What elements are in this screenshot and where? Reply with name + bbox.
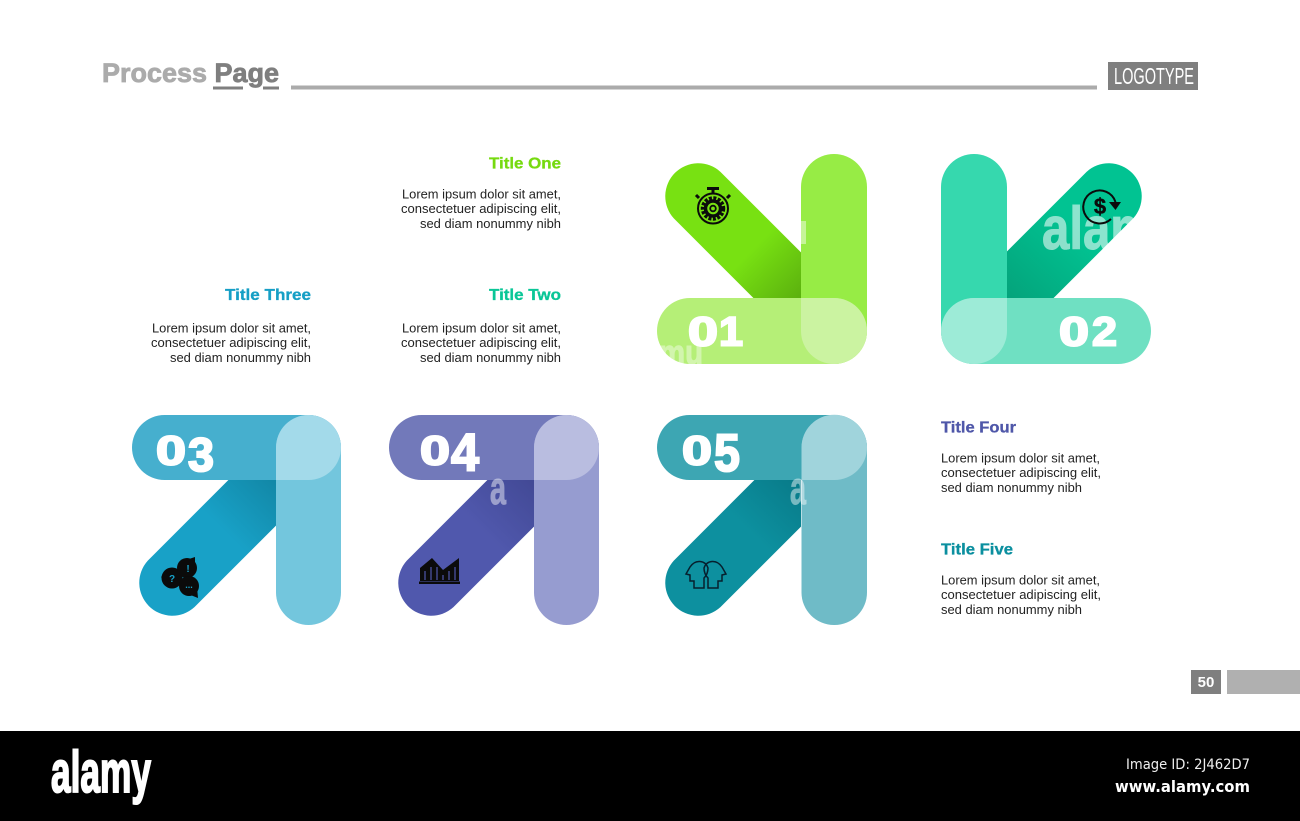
diagonal shaft xyxy=(665,480,801,616)
header rule xyxy=(291,86,1097,90)
text block: Title Five: consectetuer adipiscing elit, xyxy=(941,587,1101,602)
watermark fragment xyxy=(801,221,806,244)
text block: Title Five: Title Five xyxy=(941,542,1013,558)
icon: three speech bubbles: ! xyxy=(186,564,190,575)
number 03: 3 xyxy=(188,428,214,481)
text block: Title Two: sed diam nonummy nibh xyxy=(420,350,561,365)
icon: three speech bubbles: ? xyxy=(169,574,175,585)
watermark fragment: a xyxy=(790,462,806,514)
number 02: 0 xyxy=(1059,308,1089,354)
number 02: 2 xyxy=(1092,308,1117,354)
diagonal shaft xyxy=(665,163,801,298)
bar overlap xyxy=(941,298,1007,364)
watermark fragment: a xyxy=(490,462,506,514)
text block: Title Five xyxy=(941,542,1101,617)
icon: dollar cycle: $ xyxy=(1094,194,1106,219)
header xyxy=(102,58,1198,90)
horizontal bar xyxy=(389,415,599,480)
website: www.alamy.com xyxy=(1115,777,1250,796)
watermark fragment: mu xyxy=(659,334,703,372)
bar overlap xyxy=(801,298,867,364)
icon: three speech bubbles xyxy=(161,557,199,598)
bar overlap xyxy=(276,415,341,480)
arrow 02 xyxy=(941,154,1154,364)
number 05 xyxy=(682,424,740,483)
number 05: 5 xyxy=(714,424,740,483)
number 04: 0 xyxy=(420,428,450,474)
text block: Title One: sed diam nonummy nibh xyxy=(420,216,561,231)
icon: stopwatch with gear xyxy=(696,188,730,224)
text block: Title Three: consectetuer adipiscing elit, xyxy=(151,335,311,350)
arrow 01 xyxy=(657,154,867,364)
vertical bar xyxy=(941,154,1007,364)
text block: Title Three xyxy=(151,287,311,365)
text block: Title One: Lorem ipsum dolor sit amet, xyxy=(402,186,561,202)
vertical bar xyxy=(802,415,867,625)
text block: Title Two xyxy=(401,287,561,365)
logotype badge: LOGOTYPE xyxy=(1114,63,1194,89)
text block: Title Three: Title Three xyxy=(225,287,311,304)
text block: Title One xyxy=(401,156,561,231)
icon: three speech bubbles: ... xyxy=(185,580,193,590)
title underline xyxy=(213,86,279,90)
footer logo: alamy: alamy xyxy=(51,740,151,805)
text block: Title Three: sed diam nonummy nibh xyxy=(170,350,311,365)
number 02 xyxy=(1059,308,1117,354)
number 01 xyxy=(688,308,743,354)
number 04: 4 xyxy=(451,424,479,482)
icon: two heads xyxy=(686,561,726,588)
vertical bar xyxy=(276,415,341,625)
text block: Title One: consectetuer adipiscing elit, xyxy=(401,201,561,216)
icon: line and bar chart xyxy=(419,558,460,584)
number 01: 1 xyxy=(719,308,743,354)
horizontal bar xyxy=(657,415,867,480)
horizontal bar xyxy=(657,298,867,364)
number 01: 0 xyxy=(688,308,718,354)
image id: Image ID: 2J462D7 xyxy=(1126,757,1250,773)
arrow 03 xyxy=(132,415,341,625)
text block: Title Four: Lorem ipsum dolor sit amet, xyxy=(941,450,1100,466)
page number bar xyxy=(1227,670,1300,694)
text block: Title Five: Lorem ipsum dolor sit amet, xyxy=(941,572,1100,588)
diagonal shaft xyxy=(398,480,534,616)
text block: Title Four: consectetuer adipiscing elit, xyxy=(941,465,1101,480)
number 04 xyxy=(420,424,479,482)
icon: dollar cycle xyxy=(1083,190,1121,223)
text block: Title Four xyxy=(941,420,1101,495)
title: Process Page: Process Page xyxy=(102,58,279,88)
vertical bar xyxy=(534,415,599,625)
vertical bar xyxy=(801,154,867,364)
horizontal bar xyxy=(132,415,341,480)
text block: Title Three: Lorem ipsum dolor sit amet, xyxy=(152,320,311,336)
text block: Title Four: sed diam nonummy nibh xyxy=(941,480,1082,495)
arrow 05 xyxy=(657,415,867,625)
text block: Title Five: sed diam nonummy nibh xyxy=(941,602,1082,617)
bar overlap xyxy=(802,415,867,480)
diagonal shaft xyxy=(139,480,276,616)
diagonal shaft xyxy=(1007,163,1142,298)
number 03: 0 xyxy=(156,428,186,474)
page number: 50 xyxy=(1198,674,1214,691)
text block: Title Two: Title Two xyxy=(489,287,561,304)
horizontal bar xyxy=(941,298,1151,364)
logotype badge xyxy=(1108,62,1198,90)
arrow 04 xyxy=(389,415,599,625)
footer band xyxy=(0,731,1300,821)
text block: Title Two: consectetuer adipiscing elit, xyxy=(401,335,561,350)
text block: Title One: Title One xyxy=(489,156,561,172)
text block: Title Two: Lorem ipsum dolor sit amet, xyxy=(402,320,561,336)
watermark fragment: alam xyxy=(1042,195,1154,262)
text block: Title Four: Title Four xyxy=(941,420,1016,436)
page number xyxy=(1191,670,1221,694)
number 05: 0 xyxy=(682,428,712,474)
bar overlap xyxy=(534,415,599,480)
number 03 xyxy=(156,428,214,481)
